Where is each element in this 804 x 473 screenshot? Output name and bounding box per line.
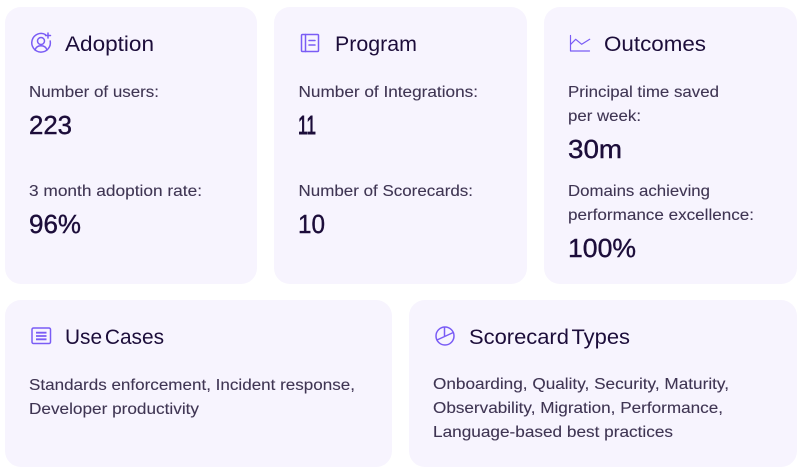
value: 11: 11	[298, 110, 316, 140]
panel: Scorecard Types	[409, 300, 797, 467]
value: 223: 223	[29, 110, 72, 140]
value: 10: 10	[298, 209, 325, 239]
text: use case list: Developer productivity	[29, 401, 199, 418]
label: domains achieving: Domains achieving	[568, 183, 710, 200]
panel: Use Cases	[5, 300, 392, 467]
text: use case list: Standards enforcement, Incident response,	[29, 377, 355, 394]
label: integrations: Number of Integrations:	[298, 84, 478, 101]
icon: pie chart	[436, 327, 454, 345]
panel: Adoption	[5, 7, 257, 284]
value: 96%: 96%	[29, 209, 81, 239]
heading: Outcomes: Outcomes	[604, 33, 706, 56]
text: scorecard type list: Onboarding, Quality, Security, Maturity,	[433, 376, 729, 393]
heading: Use Cases: Use Cases	[65, 326, 164, 349]
heading: Adoption: Adoption	[65, 33, 154, 56]
panel: Outcomes	[544, 7, 797, 284]
heading: Program: Program	[335, 33, 417, 56]
value: 100%: 100%	[568, 233, 636, 263]
label: scorecards: Number of Scorecards:	[298, 183, 473, 200]
text: scorecard type list: Observability, Migration, Performance,	[433, 400, 723, 417]
icon: line chart	[570, 36, 590, 51]
value: 30m: 30m	[568, 134, 622, 164]
label: number of users: Number of users:	[29, 84, 159, 101]
panel: Program	[274, 7, 527, 284]
icon: text document	[32, 328, 50, 344]
icon: notebook	[302, 34, 318, 52]
heading: Scorecard Types: Scorecard Types	[469, 326, 630, 349]
label: principal time saved: per week:	[568, 108, 641, 125]
label: principal time saved: Principal time saved	[568, 84, 719, 101]
text: scorecard type list: Language-based best practices	[433, 424, 673, 441]
icon: user with plus	[32, 33, 50, 52]
label: adoption rate: 3 month adoption rate:	[29, 183, 202, 200]
label: domains achieving: performance excellence:	[568, 207, 754, 224]
